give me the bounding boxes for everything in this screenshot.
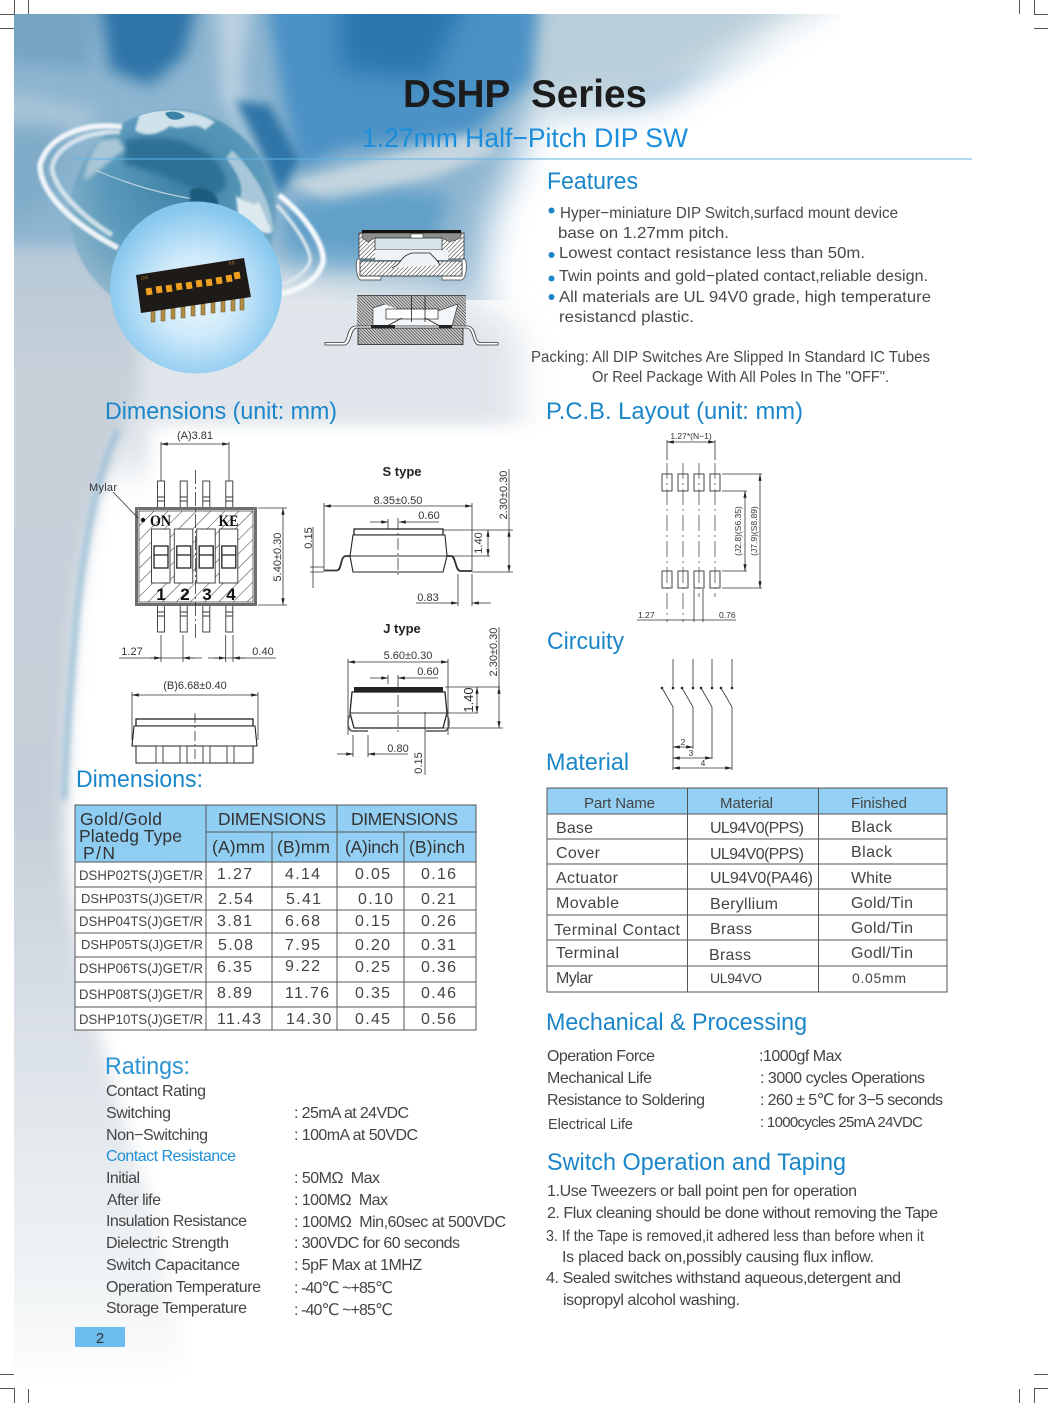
table rows: 0.46 [421, 985, 457, 1002]
j type side view: 1.40 [461, 687, 476, 713]
ratings list: : 50MΩ Max [294, 1170, 380, 1187]
switch actuators [146, 272, 241, 295]
ratings list: Dielectric Strength [106, 1235, 229, 1252]
material table header: Material [720, 795, 773, 812]
ratings list: : 100MΩ Max [294, 1192, 388, 1209]
material table [547, 788, 947, 992]
front-view dimension drawing: (B)6.68±0.40 [163, 680, 227, 692]
s type side view: 0.15 [303, 527, 315, 549]
heading: dimensions unit: Dimensions (unit: mm) [105, 398, 337, 425]
table rows: 7.95 [285, 937, 321, 954]
table rows: DSHP05TS(J)GET/R [81, 938, 203, 952]
ratings list: : 25mA at 24VDC [294, 1105, 409, 1122]
ratings list: Storage Temperature [106, 1300, 247, 1317]
icon: switch pins [151, 297, 244, 322]
table rows: 11.43 [217, 1011, 262, 1028]
circuit diagram: 4 [701, 758, 706, 768]
features list: resistancd plastic. [559, 309, 694, 326]
table rows: 0.56 [421, 1011, 457, 1028]
ratings list: Insulation Resistance [106, 1213, 247, 1230]
j type side view: 0.60 [417, 666, 439, 678]
operation notes: Is placed back on,possibly causing flux inflow. [562, 1249, 874, 1266]
table rows: 8.89 [217, 985, 253, 1002]
table rows: DSHP02TS(J)GET/R [79, 868, 203, 883]
page number: 2 [96, 1330, 104, 1347]
table rows [79, 866, 457, 1028]
ratings list: Switch Capacitance [106, 1257, 240, 1274]
top-view dimension drawing: 5.40±0.30 [272, 533, 284, 581]
cross-section drawing: bottom [325, 296, 498, 345]
table rows: DSHP06TS(J)GET/R [79, 961, 203, 976]
pins [158, 481, 233, 632]
table header: (A)mm [212, 837, 265, 857]
table rows: 3.81 [217, 913, 253, 930]
material table rows: Beryllium [710, 896, 778, 913]
j type side view: J type [383, 621, 421, 636]
circuit diagram [661, 659, 733, 770]
page number [75, 1327, 125, 1347]
top-view dimension drawing: 2 [180, 585, 190, 604]
top-view dimension drawing: 1 [156, 585, 166, 604]
top-view dimension drawing: ON [150, 513, 171, 530]
material table rows: White [851, 870, 892, 887]
mechanical specs list: : 1000cycles 25mA 24VDC [760, 1114, 923, 1131]
table rows: 0.36 [421, 959, 457, 976]
table header: Gold/Gold [80, 809, 162, 829]
table rows: 6.68 [285, 913, 321, 930]
table header: P/N [83, 843, 115, 863]
product photo: dip switch in circle: ON [140, 275, 149, 282]
features list: Lowest contact resistance less than 50m. [559, 245, 865, 262]
material table rows: UL94V0(PPS) [710, 846, 804, 863]
pcb layout drawing [637, 431, 762, 622]
table rows: 1.27 [217, 866, 253, 883]
mechanical specs list: Electrical Life [548, 1117, 633, 1133]
mechanical specs list: Mechanical Life [547, 1070, 652, 1087]
features list: Hyper−miniature DIP Switch,surfacd mount device [560, 205, 898, 222]
material table rows: Actuator [556, 870, 619, 887]
material table rows: Mylar [556, 970, 594, 987]
heading: pcb layout: P.C.B. Layout (unit: mm) [546, 398, 803, 425]
mechanical specs list: : 3000 cycles Operations [760, 1070, 925, 1087]
features list: base on 1.27mm pitch. [558, 225, 729, 242]
table rows: 0.31 [421, 937, 457, 954]
operation notes: 4. Sealed switches withstand aqueous,detergent and [546, 1270, 901, 1287]
material table rows: Terminal Contact [554, 922, 681, 939]
s type side view: 2.30±0.30 [498, 471, 510, 519]
features list: All materials are UL 94V0 grade, high temperature [559, 289, 931, 306]
heading: circuitry: Circuity [547, 628, 624, 655]
table header [79, 809, 465, 863]
table rows: 9.22 [285, 958, 321, 975]
top-view dimension drawing: 1.27 [121, 646, 143, 658]
table rows: 0.25 [355, 959, 391, 976]
features list: Twin points and gold−plated contact,reliable design. [559, 268, 928, 285]
j type side view: 0.80 [387, 743, 409, 755]
table header: (B)inch [409, 837, 465, 857]
table rows: DSHP04TS(J)GET/R [79, 914, 203, 929]
material table rows: UL94V0(PA46) [710, 870, 813, 887]
ratings list: : 5pF Max at 1MHZ [294, 1257, 422, 1274]
j type side view: 5.60±0.30 [384, 650, 432, 662]
j type side view: 2.30±0.30 [488, 628, 500, 676]
pcb layout drawing: 1.27*(N−1) [670, 431, 712, 441]
material table rows [554, 819, 913, 987]
packing note: Or Reel Package With All Poles In The "OFF". [592, 369, 889, 386]
features list [548, 205, 931, 326]
material table rows: Cover [556, 845, 601, 862]
globe and ring artwork [40, 110, 323, 316]
table rows: 0.16 [421, 866, 457, 883]
ratings list: Initial [106, 1170, 140, 1187]
pcb layout drawing: (J7.9)(S8.89) [749, 506, 759, 556]
pcb layout drawing: 0.76 [719, 610, 736, 620]
mechanical specs list: :1000gf Max [759, 1048, 842, 1065]
material table header [584, 795, 907, 812]
material table rows: Gold/Tin [851, 895, 913, 912]
ratings list: After life [107, 1192, 161, 1209]
ratings list: : 100MΩ Min,60sec at 500VDC [294, 1214, 506, 1231]
product photo: dip switch in circle [110, 202, 282, 374]
top-view dimension drawing: (A)3.81 [177, 430, 213, 442]
operation notes [546, 1183, 938, 1309]
material table rows: UL94VO [710, 970, 762, 986]
top-view dimension drawing: Mylar [89, 482, 117, 494]
table rows: 0.20 [355, 937, 391, 954]
s type side view: 8.35±0.50 [374, 495, 422, 507]
switch body [136, 258, 251, 313]
ratings list [106, 1083, 506, 1319]
top-view dimension drawing [89, 430, 287, 662]
ratings list: : -40℃ ~+85℃ [294, 1280, 393, 1297]
table rows: 2.54 [218, 891, 254, 908]
packing note: Packing: All DIP Switches Are Slipped In Standard IC Tubes [531, 349, 930, 366]
table header: Platedg Type [79, 826, 182, 846]
ratings list: : 100mA at 50VDC [294, 1127, 418, 1144]
material table rows: Gold/Tin [851, 920, 913, 937]
ratings list: Contact Rating [106, 1083, 206, 1100]
table rows: 14.30 [286, 1011, 333, 1028]
s type side view [303, 464, 513, 606]
table rows: DSHP10TS(J)GET/R [79, 1012, 203, 1027]
header background artwork [14, 14, 838, 1338]
circuit diagram: 3 [689, 748, 694, 758]
heading: dimensions table: Dimensions: [76, 766, 203, 793]
mechanical specs list: Resistance to Soldering [547, 1092, 705, 1109]
s type side view: 0.83 [417, 592, 439, 604]
material table header: Finished [851, 795, 907, 812]
material table rows: Brass [709, 947, 751, 964]
table rows: 0.45 [355, 1011, 391, 1028]
table rows: 5.08 [218, 937, 254, 954]
mechanical specs list: Operation Force [547, 1048, 655, 1065]
ratings list: Contact Resistance [106, 1148, 236, 1165]
table rows: 0.26 [421, 913, 457, 930]
product photo: dip switch in circle: KE [228, 260, 237, 267]
ratings list: : 300VDC for 60 seconds [294, 1235, 460, 1252]
material table rows: Base [556, 820, 593, 837]
material table rows: Terminal [556, 945, 619, 962]
table rows: DSHP08TS(J)GET/R [79, 987, 203, 1002]
operation notes: 3. If the Tape is removed,it adhered less than before when it [546, 1228, 924, 1245]
heading: features: Features [547, 168, 638, 195]
ratings list: Switching [106, 1105, 171, 1122]
material table rows: Movable [556, 895, 619, 912]
top-view dimension drawing: 3 [202, 585, 212, 604]
title: DSHP Series [403, 73, 647, 116]
table rows: 0.05 [355, 866, 391, 883]
s type side view: 1.40 [473, 532, 485, 554]
table rows: DSHP03TS(J)GET/R [81, 892, 203, 906]
heading: mechanical and processing: Mechanical & Processing [546, 1009, 807, 1036]
ratings list: Non−Switching [106, 1127, 208, 1144]
table header: (A)inch [345, 837, 399, 857]
table header: (B)mm [277, 837, 330, 857]
operation notes: 1.Use Tweezers or ball point pen for operation [547, 1183, 857, 1200]
table rows: 0.35 [355, 985, 391, 1002]
operation notes: isopropyl alcohol washing. [563, 1292, 740, 1309]
mechanical specs list [547, 1048, 943, 1133]
material table header: Part Name [584, 795, 655, 812]
circuit diagram: 2 [681, 737, 686, 747]
table rows: 6.35 [217, 959, 253, 976]
heading: material: Material [546, 749, 629, 776]
table rows: 0.10 [358, 891, 394, 908]
pcb layout drawing: (J2.8)(S6.35) [733, 506, 743, 556]
s type side view: S type [382, 464, 422, 479]
j type side view [337, 621, 503, 775]
pcb layout drawing: 1.27 [638, 610, 655, 620]
table header: DIMENSIONS [218, 809, 326, 829]
mechanical specs list: : 260 ± 5℃ for 3−5 seconds [760, 1092, 943, 1109]
table header: DIMENSIONS [351, 809, 458, 829]
ratings list: Operation Temperature [106, 1279, 261, 1296]
j type side view: 0.15 [413, 752, 425, 774]
material table rows: Black [851, 819, 893, 836]
dimensions table [75, 805, 476, 1030]
packing note [531, 349, 930, 386]
ratings list: : -40℃ ~+85℃ [294, 1302, 393, 1319]
subtitle: 1.27mm Half−Pitch DIP SW [362, 123, 689, 153]
heading: ratings: Ratings: [105, 1053, 190, 1080]
table rows: 4.14 [285, 866, 321, 883]
cross-section drawing: top [356, 230, 466, 280]
top-view dimension drawing: KE [218, 513, 238, 530]
operation notes: 2. Flux cleaning should be done without removing the Tape [547, 1205, 938, 1222]
material table rows: UL94V0(PPS) [710, 820, 804, 837]
material table rows: Black [851, 844, 893, 861]
heading: switch operation and taping: Switch Operation and Taping [547, 1149, 846, 1176]
top-view dimension drawing: 4 [226, 585, 236, 604]
table rows: 11.76 [285, 985, 330, 1002]
body [136, 508, 256, 604]
top-view dimension drawing: 0.40 [252, 646, 274, 658]
material table rows: 0.05mm [852, 970, 906, 986]
material table rows: Brass [710, 921, 752, 938]
table rows: 0.15 [355, 913, 391, 930]
s type side view: 0.60 [418, 510, 440, 522]
table rows: 0.21 [421, 891, 457, 908]
switch slots [152, 529, 238, 583]
material table rows: Godl/Tin [851, 945, 913, 962]
table rows: 5.41 [286, 891, 322, 908]
front-view dimension drawing [132, 680, 258, 763]
